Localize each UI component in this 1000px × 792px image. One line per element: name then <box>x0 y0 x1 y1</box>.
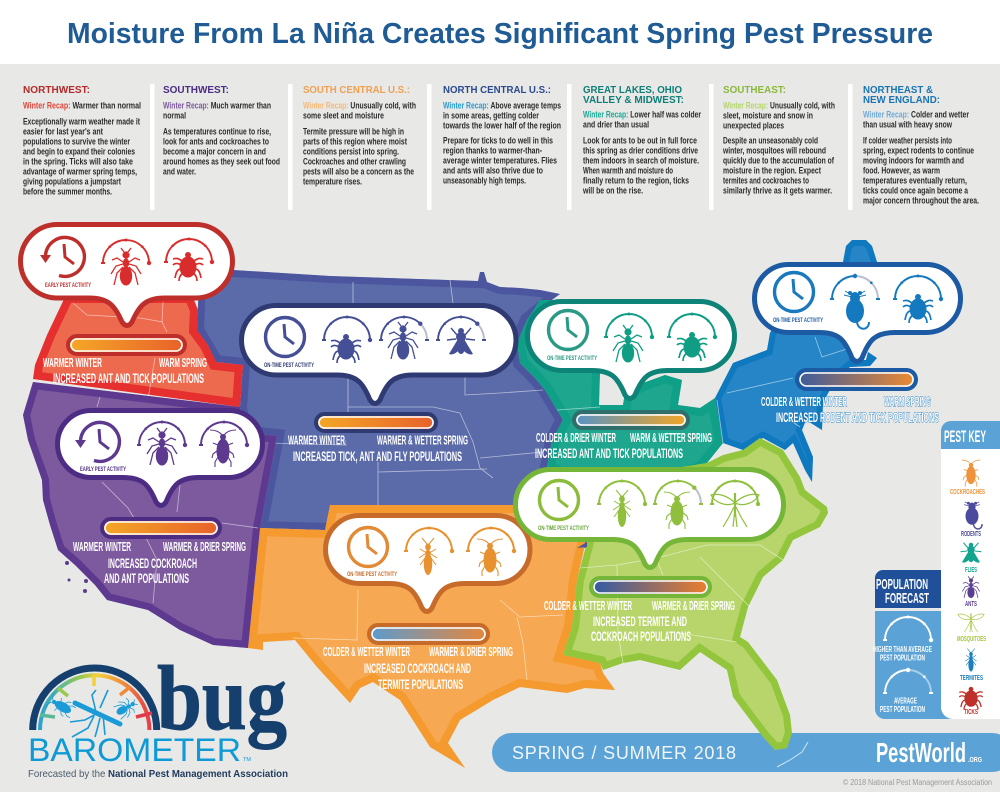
text block: Southwest: normal <box>163 110 186 122</box>
inner bar outline <box>105 522 217 534</box>
labels: Northeast: WARM SPRING <box>884 395 931 409</box>
text block: Southeast: winter, mosquitoes will rebound <box>722 146 826 156</box>
text block: South Central <box>303 84 416 188</box>
labels: Southeast: COLDER & WETTER WINTER <box>544 599 632 613</box>
labels: Great Lakes: COLDER & DRIER WINTER <box>536 431 616 445</box>
gauge: rodents <box>830 274 880 329</box>
key: ticks: TICKS <box>964 707 978 716</box>
forecast legend panel <box>875 611 960 719</box>
text block: Southwest: look for ants and cockroaches to <box>163 136 269 148</box>
region: Southeast <box>563 438 828 767</box>
icon: on-time clock <box>266 318 304 356</box>
text block: North Central: towards the lower half of the region <box>443 120 561 132</box>
text block: Northwest <box>23 84 141 198</box>
inner bar outline <box>594 581 707 593</box>
heading: pest key <box>941 421 1000 449</box>
labels: Southwest: WARMER & DRIER SPRING <box>163 540 246 554</box>
key body <box>941 449 1000 719</box>
text block: North Central: and ants will also thrive due to <box>443 166 543 176</box>
gauge: ants <box>604 312 654 362</box>
text block: North Central: region thanks to warmer-than- <box>443 146 542 156</box>
inner bar outline <box>372 628 485 640</box>
gauge: cockroaches <box>466 526 516 576</box>
region: Great Lakes, Ohio Valley and Midwest <box>518 300 723 468</box>
label: higher than average <box>873 644 932 662</box>
text block: South Central: temperature rises. <box>303 176 362 188</box>
panel: pest key <box>941 421 1000 719</box>
key: mosquitoes <box>957 613 986 643</box>
text block: Great Lakes: and drier than usual <box>583 120 649 130</box>
text block: Southwest: around homes as they seek out food <box>163 156 280 168</box>
key: termites: TERMITES <box>960 673 983 682</box>
region: Southwest <box>23 382 277 648</box>
text block: Northeast: NEW ENGLAND: <box>863 94 940 106</box>
text block: Northwest: NORTHWEST: <box>23 84 90 96</box>
label: higher than average: HIGHER THAN AVERAGE <box>873 644 932 654</box>
tagline: Forecasted by the National Pest Management Association <box>28 769 288 780</box>
text block: Great Lakes: When warmth and moisture do <box>583 166 673 176</box>
callout: Southeast <box>516 470 784 568</box>
text block: North Central <box>443 84 561 186</box>
text block: North Central: NORTH CENTRAL U.S.: <box>443 84 551 96</box>
text block: North Central: average winter temperatures. Flies <box>443 156 557 166</box>
gauge: termites <box>404 526 454 575</box>
wordmark: bug: bug <box>157 647 287 749</box>
icon: early clock <box>75 422 119 461</box>
callout: Southwest <box>57 410 262 506</box>
key: ants: ANTS <box>965 599 977 608</box>
title band <box>0 0 1000 64</box>
text block: Great Lakes: Look for ants to be out in full force <box>583 136 697 146</box>
text block: South Central: SOUTH CENTRAL U.S.: <box>303 84 410 96</box>
text block: South Central: parts of this region where moist <box>303 136 408 148</box>
icon: on-time clock <box>774 272 814 312</box>
text block: Great Lakes: GREAT LAKES, OHIO <box>583 84 682 96</box>
text block: Southeast: Despite an unseasonably cold <box>723 136 818 146</box>
text block: Great Lakes: finally return to the region, ticks <box>583 176 689 186</box>
inner bar outline <box>319 417 433 428</box>
text block: Southwest: and water. <box>163 166 196 178</box>
labels: North Central: WARMER & WETTER SPRING <box>377 434 468 448</box>
key: flies: FLIES <box>965 565 977 574</box>
icon: on-time clock <box>548 310 588 350</box>
gauge: average <box>883 668 933 694</box>
text block: Northeast: food. However, as warm <box>863 166 940 176</box>
heading: population forecast <box>875 570 941 608</box>
text block: Northwest: populations to survive the winter <box>23 136 130 148</box>
text block: North Central: in some areas, getting colder <box>443 110 539 122</box>
gauge: ants <box>101 238 151 286</box>
text block: South Central: Cockroaches and other crawling <box>303 156 406 168</box>
text block: Southeast <box>722 84 835 196</box>
labels: Southwest: WARMER WINTER <box>73 540 131 554</box>
forecast bar: Southwest <box>102 519 220 537</box>
key: cockroaches <box>950 460 985 496</box>
labels: Southwest: AND ANT POPULATIONS <box>104 571 189 586</box>
text block: South Central: some sleet and moisture <box>303 110 384 122</box>
map of United States regions <box>23 240 885 768</box>
barometer arc <box>33 668 157 730</box>
panel: population forecast <box>873 570 960 719</box>
forecast bar: North Central <box>316 414 436 431</box>
gauge: flies <box>436 316 486 354</box>
inner bar outline <box>71 339 182 351</box>
text block: Southeast: SOUTHEAST: <box>723 84 786 96</box>
labels: South Central <box>323 645 513 692</box>
forecast bar: South Central <box>369 625 488 643</box>
gauge: ants <box>379 316 429 360</box>
label: early pest activity: EARLY PEST ACTIVITY <box>45 282 91 289</box>
text block: Northeast: than usual with heavy snow <box>863 120 952 130</box>
callout: North Central <box>242 306 516 404</box>
inner bar outline <box>577 415 685 425</box>
Bug Barometer logo <box>28 647 288 780</box>
gauge: ticks <box>164 238 214 281</box>
text block: Southwest <box>163 84 280 178</box>
label: early pest activity: EARLY PEST ACTIVITY <box>80 466 126 473</box>
key: ticks <box>959 687 983 716</box>
text block: Northwest: Exceptionally warm weather made it <box>23 116 141 128</box>
footer band: season <box>492 733 1000 772</box>
text block: Southeast: termites and cockroaches to <box>723 176 809 186</box>
forecast bar: Northeast <box>797 370 916 389</box>
PestWorld logo: .ORG <box>968 755 982 764</box>
text block: Southwest: SOUTHWEST: <box>163 84 229 96</box>
text block: Southeast: sleet, moisture and snow in <box>723 110 813 122</box>
labels: Northwest <box>43 356 207 386</box>
labels: Southeast: COCKROACH POPULATIONS <box>591 629 691 644</box>
text block: Great Lakes: this spring as drier conditions drive <box>583 146 698 156</box>
gauge: termites <box>597 480 647 527</box>
callout: Northeast <box>754 264 960 362</box>
callout: Northwest <box>20 224 232 326</box>
labels: North Central: INCREASED TICK, ANT AND FLY POPULATIONS <box>293 449 462 464</box>
text block: South Central: Winter Recap: Unusually cold, with <box>303 100 416 112</box>
gauge: ticks <box>667 312 717 361</box>
text block: Northeast: If colder weather persists into <box>863 136 952 146</box>
logo insects <box>45 690 141 737</box>
key: ants <box>962 576 980 608</box>
heading: population forecast: FORECAST <box>885 590 929 607</box>
labels: Great Lakes <box>535 431 712 461</box>
text block: Southeast: moisture in the region. Expect <box>723 166 822 176</box>
wordmark: barometer: BAROMETER <box>28 732 241 768</box>
gauge: mosquitoes <box>710 480 760 527</box>
text block: Northeast: NORTHEAST & <box>863 84 933 96</box>
labels: Northeast <box>761 395 939 425</box>
trademark: TM <box>243 757 251 763</box>
text block: Northwest: easier for last year's ant <box>23 126 104 138</box>
region: South Central <box>248 505 615 768</box>
label: average: PEST POPULATION <box>880 704 925 714</box>
label: on-time pest activity: ON-TIME PEST ACTIVITY <box>538 525 589 532</box>
text block: Northwest: giving populations a jumpstart <box>23 176 122 188</box>
text block: Southeast: Winter Recap: Unusually cold, with <box>723 100 835 112</box>
labels: South Central: TERMITE POPULATIONS <box>378 677 463 692</box>
text block: Southeast: similarly thrive as it gets warmer. <box>723 186 832 196</box>
label: on-time pest activity: ON-TIME PEST ACTIVITY <box>773 317 823 324</box>
labels: Southeast <box>544 599 735 644</box>
heading: population forecast: POPULATION <box>876 576 928 593</box>
key: rodents <box>961 502 982 538</box>
labels: South Central: COLDER & WETTER WINTER <box>323 645 410 659</box>
labels: Southwest: INCREASED COCKROACH <box>108 556 197 571</box>
label: on-time pest activity: ON-TIME PEST ACTIVITY <box>264 362 314 369</box>
text block: Great Lakes <box>582 84 701 196</box>
gauge: cockroaches <box>653 480 703 529</box>
text block: Northwest: advantage of warmer spring temps, <box>23 166 137 178</box>
icon: on-time clock <box>348 528 388 566</box>
gauge: higher than average <box>883 616 933 642</box>
region: Northwest <box>33 295 243 407</box>
title: Moisture From La Niña Creates Significant Spring Pest Pressure <box>67 18 933 50</box>
text block: South Central: Termite pressure will be high in <box>303 126 404 138</box>
text block: South Central: pests will also be a concern as the <box>303 166 414 178</box>
gauge: ticks <box>893 274 943 323</box>
text block: Southwest: As temperatures continue to rise, <box>163 126 271 138</box>
labels: Southeast: WARMER & DRIER SPRING <box>652 599 735 613</box>
callout: South Central <box>326 516 530 612</box>
text block: North Central: unseasonably high temps. <box>443 176 526 186</box>
key: rodents: RODENTS <box>961 529 981 538</box>
labels: South Central: INCREASED COCKROACH AND <box>364 661 471 676</box>
text block: Great Lakes: will be on the rise. <box>582 186 643 196</box>
label: on-time pest activity: ON-TIME PEST ACTIVITY <box>547 355 597 362</box>
text block: Great Lakes: Winter Recap: Lower half was colder <box>583 110 701 120</box>
labels: Northwest: WARM SPRING <box>159 356 207 370</box>
text block: Southeast: quickly due to the accumulation of <box>723 156 835 166</box>
labels: South Central: WARMER & DRIER SPRING <box>429 645 513 659</box>
labels: Great Lakes: INCREASED ANT AND TICK POPULATIONS <box>535 446 683 461</box>
text block: Southeast: unexpected places <box>723 120 784 132</box>
inner bar outline <box>800 373 913 386</box>
text block: Southwest: Winter Recap: Much warmer than <box>163 100 271 112</box>
text block: Northeast <box>863 84 979 206</box>
icon: on-time clock <box>540 480 578 520</box>
labels: Great Lakes: WARM & WETTER SPRING <box>630 431 712 445</box>
labels: North Central: WARMER WINTER <box>288 434 345 448</box>
text block: Northwest: in the spring. Ticks will also take <box>23 156 133 168</box>
text block: Northwest: and begin to expand their colonies <box>23 146 135 158</box>
key: termites <box>960 649 983 682</box>
label: higher than average: PEST POPULATION <box>880 652 925 662</box>
labels: Southeast: INCREASED TERMITE AND <box>593 614 687 629</box>
label: on-time pest activity: ON-TIME PEST ACTIVITY <box>347 571 397 578</box>
region: North Central <box>197 268 590 548</box>
text block: North Central: Prepare for ticks to do well in this <box>443 136 553 146</box>
callout: Great Lakes <box>528 302 734 398</box>
key: flies <box>960 543 982 574</box>
label: average: AVERAGE <box>894 696 917 706</box>
label: average <box>880 696 925 714</box>
season label: SPRING / SUMMER 2018 <box>512 743 736 763</box>
forecast bar: Northwest <box>68 336 185 354</box>
text block: Northwest: before the summer months. <box>23 186 112 198</box>
labels: North Central <box>288 434 468 464</box>
labels: Northwest: INCREASED ANT AND TICK POPULATIONS <box>53 371 204 386</box>
labels: Northeast: COLDER & WETTER WINTER <box>761 395 847 409</box>
gauge: ticks <box>322 316 372 363</box>
text block: Southwest: become a major concern in and <box>163 146 266 158</box>
text block: Great Lakes: them indoors in search of moisture. <box>583 156 699 166</box>
gauge: ants <box>137 420 187 466</box>
forecast bar: Southeast <box>591 578 710 596</box>
region: Northeast and New England <box>715 240 885 482</box>
labels: Northwest: WARMER WINTER <box>43 356 102 370</box>
forecast bar: Great Lakes <box>574 412 688 428</box>
text block: Northwest: Winter Recap: Warmer than normal <box>23 100 141 112</box>
text block: South Central: conditions persist into spring. <box>303 146 399 158</box>
text block: North Central: Winter Recap: Above average temps <box>443 100 561 112</box>
text block: Great Lakes: VALLEY & MIDWEST: <box>583 94 684 106</box>
text block: Northeast: Winter Recap: Colder and wetter <box>863 110 969 120</box>
gauge: cockroaches <box>199 420 249 467</box>
icon: early clock <box>40 237 84 276</box>
labels: Southwest <box>73 540 246 586</box>
